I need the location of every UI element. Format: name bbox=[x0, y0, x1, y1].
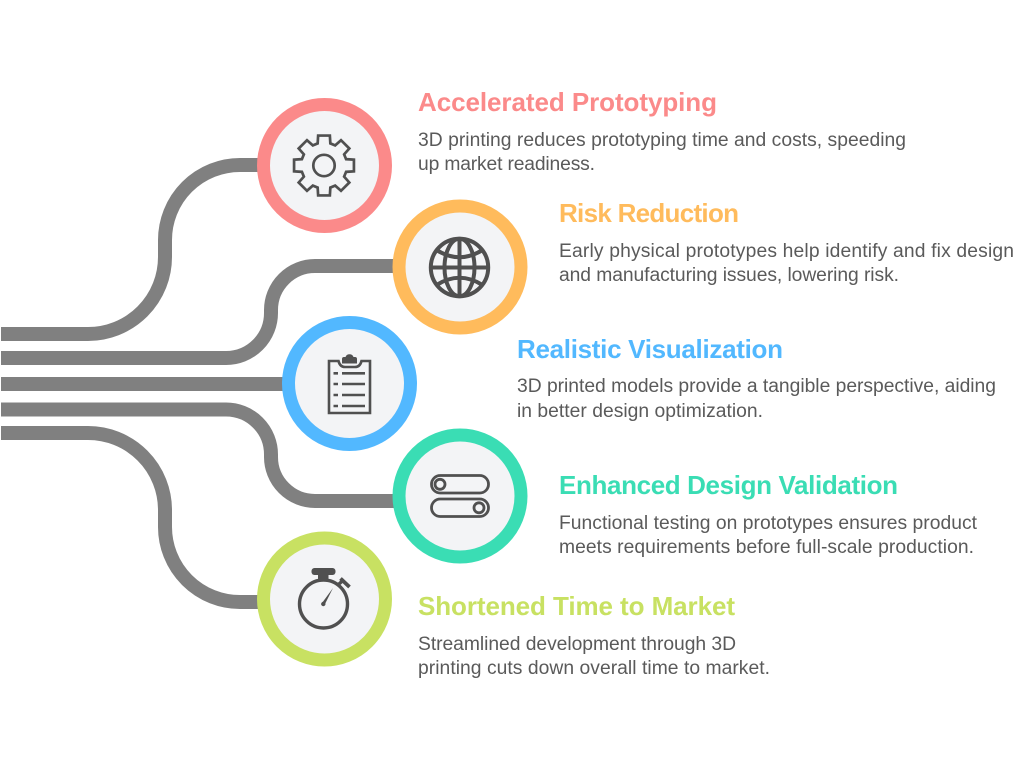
description: meets requirements before full-scale production. bbox=[559, 537, 974, 558]
panel: Accelerated Prototyping bbox=[264, 87, 906, 226]
icon: globe bbox=[430, 238, 488, 296]
description bbox=[418, 130, 906, 175]
icon: gear bbox=[294, 136, 354, 195]
description: up market readiness. bbox=[418, 154, 595, 175]
panel: Enhanced Design Validation bbox=[399, 435, 978, 558]
description bbox=[418, 634, 770, 679]
ring bbox=[399, 435, 521, 557]
ring bbox=[264, 104, 386, 226]
icon: clipboard bbox=[329, 354, 370, 413]
icon: stopwatch bbox=[300, 568, 350, 628]
description: printing cuts down overall time to market. bbox=[418, 658, 770, 679]
connector lines bbox=[1, 165, 398, 602]
ring bbox=[288, 322, 410, 444]
description: 3D printed models provide a tangible perspective, aiding bbox=[517, 376, 996, 397]
panel: Realistic Visualization bbox=[288, 322, 996, 444]
line to Enhanced Design Validation bbox=[1, 410, 398, 501]
line to Risk Reduction bbox=[1, 266, 398, 358]
ring bbox=[399, 206, 521, 328]
description: Functional testing on prototypes ensures product bbox=[559, 513, 978, 534]
description bbox=[559, 241, 1014, 286]
panel: Risk Reduction bbox=[399, 198, 1014, 328]
description bbox=[517, 376, 996, 422]
description: Streamlined development through 3D bbox=[418, 634, 736, 655]
description: and manufacturing issues, lowering risk. bbox=[559, 265, 899, 286]
heading: Enhanced Design Validation bbox=[559, 470, 898, 500]
line to Shortened Time to Market bbox=[1, 433, 262, 602]
line to Accelerated Prototyping bbox=[1, 165, 262, 334]
icon: toggles bbox=[432, 476, 488, 516]
panel: Shortened Time to Market bbox=[264, 538, 770, 679]
heading: Shortened Time to Market bbox=[418, 591, 735, 621]
heading: Accelerated Prototyping bbox=[418, 87, 717, 117]
ring bbox=[264, 538, 386, 660]
description: Early physical prototypes help identify and fix design bbox=[559, 241, 1014, 262]
line to Realistic Visualization bbox=[1, 377, 288, 391]
description bbox=[559, 513, 978, 558]
heading: Risk Reduction bbox=[559, 198, 739, 228]
description: in better design optimization. bbox=[517, 401, 763, 422]
heading: Realistic Visualization bbox=[517, 334, 783, 364]
description: 3D printing reduces prototyping time and costs, speeding bbox=[418, 130, 906, 151]
